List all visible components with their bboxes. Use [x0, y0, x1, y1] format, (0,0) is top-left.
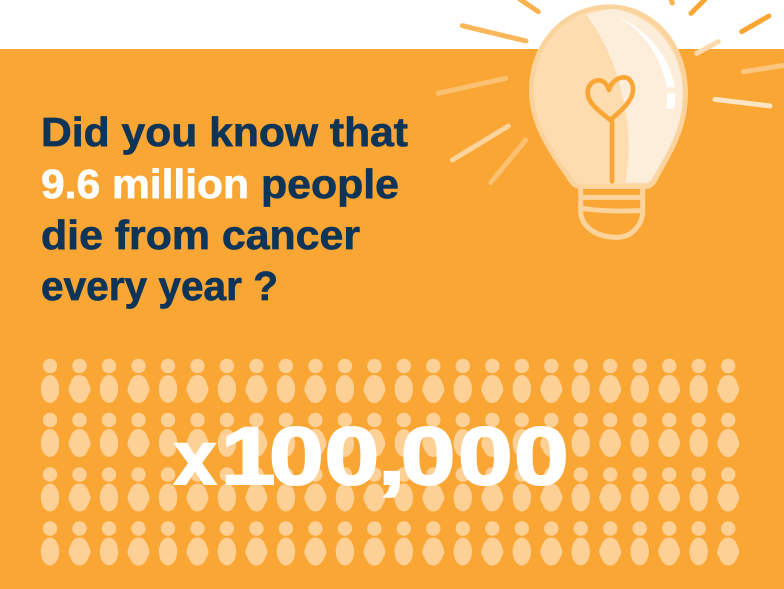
heading line 2 with highlighted number: people	[261, 161, 399, 207]
multiplier label: x	[174, 416, 216, 501]
white highlight	[618, 17, 675, 109]
heading	[41, 109, 408, 309]
people row 3	[41, 467, 739, 512]
multiplier label: 100,000	[221, 411, 569, 502]
heading line 1: Did you know that	[41, 109, 408, 155]
heart filament	[588, 77, 633, 181]
bulb screw base	[581, 189, 643, 237]
people row 1	[41, 359, 739, 403]
heading line 2 with highlighted number: 9.6 million	[41, 161, 249, 207]
bulb glass	[531, 7, 686, 187]
icon: light bulb with heart filament and rays	[438, 0, 784, 237]
lighter glass reflection	[586, 9, 683, 183]
heading line 4: every year ?	[41, 263, 278, 309]
people row 4	[41, 521, 739, 566]
rays around the bulb	[438, 0, 784, 183]
pictogram: rows of people	[41, 359, 739, 566]
heading line 3: die from cancer	[41, 212, 360, 258]
people row 2	[41, 413, 739, 457]
